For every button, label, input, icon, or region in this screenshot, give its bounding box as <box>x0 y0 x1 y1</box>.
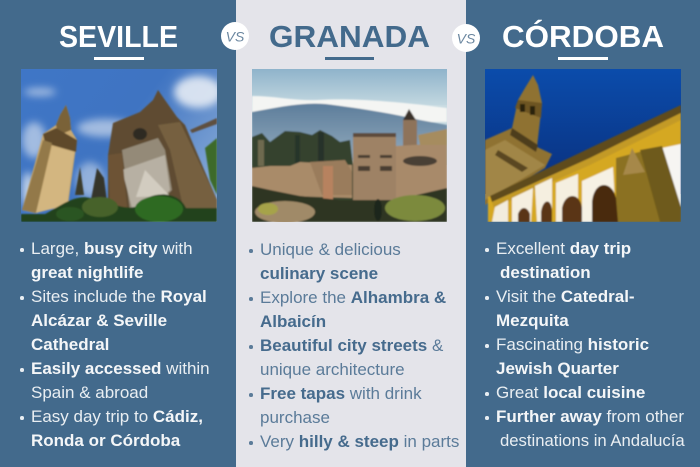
line: Alcázar: Alcázar & Seville <box>31 311 167 330</box>
text block: Córdoba features <box>485 239 685 450</box>
photo: Seville cathedral and Giralda <box>21 69 217 222</box>
arches <box>592 185 618 222</box>
text block: Granada features <box>249 240 459 451</box>
bullet: access: Easily accessed within <box>31 359 210 378</box>
photo: Córdoba Mezquita <box>485 69 681 222</box>
shadowed pier <box>616 146 676 222</box>
panel: Granada <box>236 0 466 467</box>
bullet: tapas: Free tapas with drink <box>260 384 422 403</box>
bullet: Catedral: Visit the Catedral- <box>496 287 635 306</box>
wall <box>488 106 681 222</box>
heading: Granada: GRANADA <box>269 20 430 54</box>
panel: Seville <box>0 0 235 467</box>
bullet: hilly: Very hilly & steep in parts <box>260 432 459 451</box>
bullet: culinary: Unique & delicious <box>260 240 401 259</box>
bullet: day trip: Excellent day trip <box>496 239 631 258</box>
heading underline: Córdoba <box>558 57 608 60</box>
badge: vs left <box>221 22 249 50</box>
white arcade panels <box>492 200 508 222</box>
line: Albaicín: Albaicín <box>260 312 326 331</box>
heading underline: Granada <box>325 57 374 60</box>
bullet: streets: Beautiful city streets & <box>260 336 443 355</box>
bullet: day trip: Easy day trip to Cádiz, <box>31 407 203 426</box>
line: Mezquita: Mezquita <box>496 311 569 330</box>
badge: vs right: VS <box>457 30 476 46</box>
bullet: sites: Sites include the Royal <box>31 287 207 306</box>
heading: Seville: SEVILLE <box>59 20 178 54</box>
line: architecture: unique architecture <box>260 360 405 379</box>
bullet: Alhambra: Explore the Alhambra & <box>260 288 446 307</box>
tower <box>485 75 552 205</box>
bullet: cuisine: Great local cuisine <box>496 383 645 402</box>
line: destinations: destinations in Andalucía <box>500 431 685 450</box>
Giralda <box>22 105 77 213</box>
bullet: historic: Fascinating historic <box>496 335 649 354</box>
line: Jewish Quarter: Jewish Quarter <box>496 359 619 378</box>
heading: Córdoba: CÓRDOBA <box>502 18 664 54</box>
line: great nightlife: great nightlife <box>31 263 143 282</box>
spires <box>75 167 84 195</box>
text block: Seville features <box>20 239 210 450</box>
photo: Granada Alhambra <box>252 69 447 222</box>
badge: vs left: VS <box>226 28 245 44</box>
line: Spain: Spain & abroad <box>31 383 148 402</box>
line: Cathedral: Cathedral <box>31 335 109 354</box>
cathedral <box>108 90 217 215</box>
bullet: busy city: Large, busy city with <box>31 239 193 258</box>
panel: Córdoba <box>466 0 700 467</box>
line: purchase: purchase <box>260 408 330 427</box>
line: culinary scene: culinary scene <box>260 264 378 283</box>
heading underline: Seville <box>94 57 144 60</box>
badge: vs right <box>452 24 480 52</box>
bullet: further: Further away from other <box>496 407 684 426</box>
line: destination: destination <box>500 263 591 282</box>
line: Ronda: Ronda or Córdoba <box>31 431 180 450</box>
